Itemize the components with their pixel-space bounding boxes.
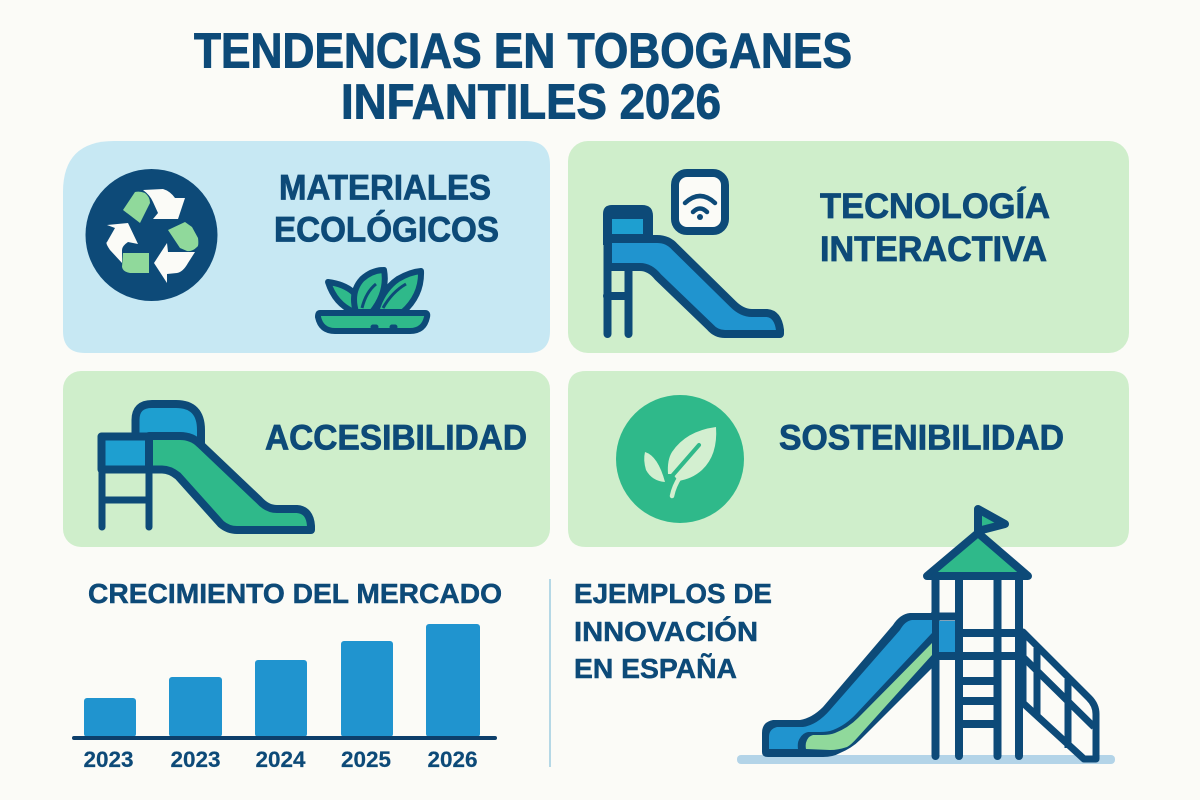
heading: materiales ecológicos: ECOLÓGICOS	[274, 210, 499, 250]
icon: wifi tablet	[675, 173, 725, 231]
year labels	[84, 747, 478, 772]
heading: tecnología interactiva	[820, 186, 1050, 269]
roof	[927, 533, 1028, 576]
icon: slide with wifi	[603, 173, 780, 334]
year labels: 2023	[170, 747, 220, 772]
chart heading: CRECIMIENTO DEL MERCADO	[88, 578, 502, 609]
slide outline	[762, 613, 935, 757]
heading: ejemplos de innovación en España: INNOVACIÓN	[574, 616, 758, 647]
green slide surface	[806, 643, 932, 750]
stair railing	[1023, 632, 1096, 759]
panel: accesibilidad	[63, 371, 550, 547]
heading: accesibilidad: ACCESIBILIDAD	[265, 418, 527, 458]
year labels: 2026	[428, 747, 478, 772]
heading: ejemplos de innovación en España: EN ESPAÑA	[574, 653, 737, 684]
slide deck	[939, 621, 955, 652]
title: TENDENCIAS EN TOBOGANES	[194, 24, 852, 78]
heading: tecnología interactiva: INTERACTIVA	[820, 230, 1047, 269]
heading: tecnología interactiva: TECNOLOGÍA	[820, 186, 1050, 226]
heading: materiales ecológicos: MATERIALES	[279, 168, 491, 208]
blue slide surface	[769, 620, 932, 749]
title: INFANTILES 2026	[341, 76, 721, 130]
panel: materiales ecológicos	[63, 141, 550, 353]
panel: tecnología interactiva	[568, 141, 1129, 353]
flag	[978, 509, 1005, 531]
year labels: 2024	[256, 747, 306, 772]
year labels: 2025	[341, 747, 391, 772]
illustration: playground tower with slide	[737, 509, 1115, 764]
heading: sostenibilidad: SOSTENIBILIDAD	[779, 418, 1064, 458]
panel: sostenibilidad	[568, 371, 1129, 547]
heading: ejemplos de innovación en España: EJEMPLOS DE	[574, 578, 772, 609]
bar chart: crecimiento del mercado	[72, 578, 502, 772]
heading: ejemplos de innovación en España	[574, 578, 772, 684]
icon: plant tray	[318, 270, 427, 331]
icon: leaf circle	[616, 395, 744, 523]
icon: recycling symbol	[86, 169, 218, 301]
year labels: 2023	[84, 747, 134, 772]
icon: accessible slide	[102, 404, 311, 530]
heading: materiales ecológicos	[274, 168, 499, 250]
title	[194, 24, 852, 130]
tower posts and ladder	[936, 576, 1019, 756]
bars	[84, 624, 480, 737]
